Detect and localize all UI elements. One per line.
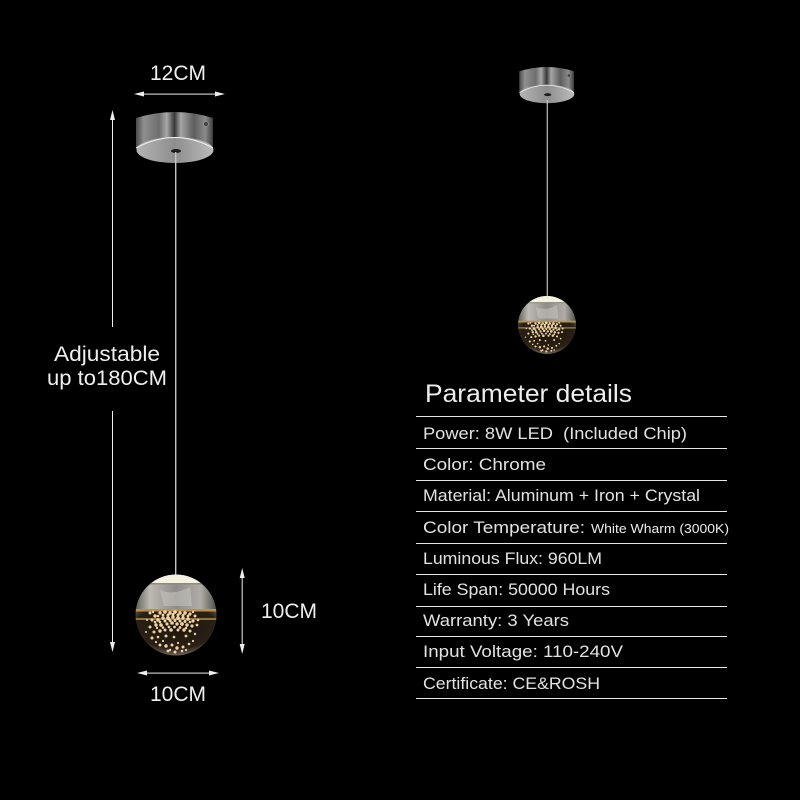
row: color: Color: Chrome — [423, 455, 546, 474]
label: adjustable height — [47, 343, 167, 390]
row: color temperature — [423, 518, 729, 537]
small lamp view — [518, 67, 576, 354]
crystal globe — [135, 574, 217, 656]
row: life span: Life Span: 50000 Hours — [423, 580, 610, 599]
dimension: globe width: 10CM — [150, 683, 206, 706]
dimension: globe height: 10CM — [261, 600, 317, 623]
arrow: adjustable height down — [110, 411, 115, 652]
row: warranty: Warranty: 3 Years — [423, 611, 569, 630]
label: adjustable height: up to180CM — [47, 367, 167, 390]
table: parameters — [416, 416, 729, 699]
row: material: Material: Aluminum + Iron + Crystal — [423, 486, 700, 505]
arrow: globe height — [240, 568, 245, 654]
suspension wire — [175, 152, 176, 576]
row: input voltage: Input Voltage: 110-240V — [423, 642, 624, 661]
row: power: Power: 8W LED (Included Chip) — [423, 424, 687, 443]
small canopy — [519, 67, 574, 103]
label: adjustable height: Adjustable — [54, 343, 160, 366]
heading: parameter details: Parameter details — [425, 380, 632, 408]
small wire — [547, 100, 548, 298]
arrow: adjustable height up — [110, 110, 115, 327]
dimensioned lamp drawing — [47, 62, 317, 706]
row: luminous flux: Luminous Flux: 960LM — [423, 549, 602, 568]
arrow: globe width — [137, 670, 219, 676]
arrow: canopy width — [134, 92, 225, 96]
ceiling canopy — [136, 112, 214, 163]
dimension: 12CM: 12CM — [150, 62, 206, 85]
row: certificate: Certificate: CE&ROSH — [423, 674, 600, 693]
row: color temperature: Color Temperature: — [423, 518, 585, 537]
small globe — [518, 296, 576, 354]
row: color temperature: White Wharm (3000K) — [591, 521, 729, 536]
